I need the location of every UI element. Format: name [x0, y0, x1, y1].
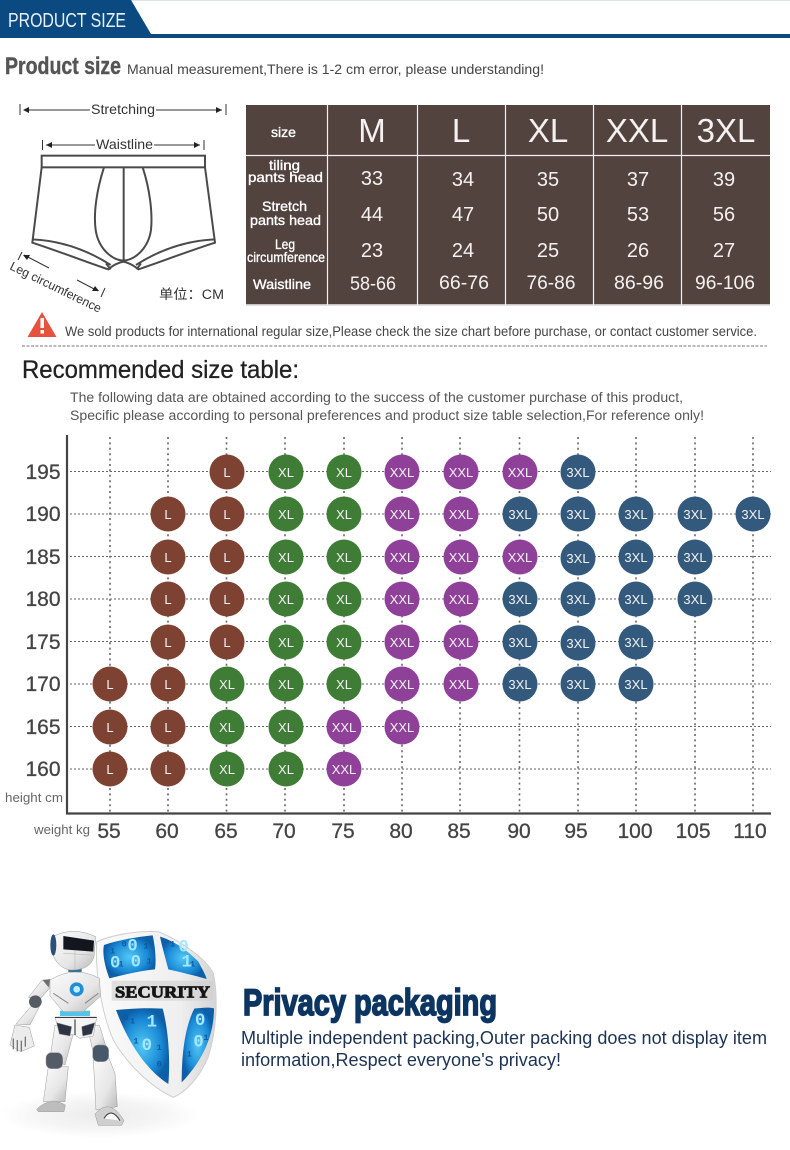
shield binary digits: 1 [190, 960, 195, 970]
pelvis [55, 1017, 97, 1038]
row: tiling pants head: 35 [537, 169, 559, 191]
height axis labels: 160 [25, 758, 61, 781]
row: stretch pants head [250, 198, 735, 228]
row: stretch pants head: 50 [537, 204, 559, 226]
row 185: 3XL [683, 550, 707, 565]
weight axis labels: 65 [214, 820, 238, 843]
row 170: L [106, 677, 114, 692]
stretching dimension: Stretching [91, 101, 155, 117]
row 165: XL [219, 720, 235, 735]
row: stretch pants head: 56 [713, 204, 735, 226]
row: leg circumference: circumference [247, 249, 325, 265]
table header row: M [358, 112, 386, 149]
row 170: L [164, 677, 172, 692]
row: leg circumference: 27 [713, 240, 735, 262]
weight axis labels: 90 [507, 820, 531, 843]
row 195: XXL [449, 465, 473, 480]
row: waistline: 96-106 [695, 273, 755, 294]
row 185: 3XL [566, 551, 590, 566]
shield binary digits: 1 [187, 1050, 192, 1060]
intro text [70, 390, 704, 423]
weight axis labels: 70 [272, 820, 296, 843]
table header row [271, 112, 755, 149]
row 185: XXL [449, 550, 473, 565]
weight axis labels: 55 [97, 820, 121, 843]
row 190: L [164, 507, 172, 522]
weight axis labels: 80 [389, 820, 413, 843]
weight axis labels: 105 [675, 820, 711, 843]
shield binary digits [110, 938, 209, 1070]
shield binary digits: 0 [157, 1060, 162, 1070]
row 180: 3XL [566, 592, 590, 607]
row: stretch pants head: Stretch [262, 198, 307, 214]
row 190: 3XL [508, 507, 532, 522]
row 175: 3XL [508, 635, 532, 650]
icon: warning triangle [28, 312, 56, 337]
shield binary digits: 1 [143, 941, 149, 951]
row: waistline: 86-96 [614, 273, 664, 294]
row: leg circumference: 23 [361, 240, 383, 262]
table header row: XXL [606, 112, 668, 149]
shield binary digits: 1 [182, 954, 192, 973]
row: stretch pants head: 53 [627, 204, 649, 226]
row 190: 3XL [566, 507, 590, 522]
robot [10, 931, 124, 1125]
row 175: XL [336, 635, 352, 650]
legs [43, 1067, 68, 1102]
privacy packaging text: Multiple independent packing,Outer packing does not display item [241, 1028, 767, 1048]
row 195: XXL [390, 465, 414, 480]
row 195: 3XL [566, 465, 590, 480]
row 185: XL [278, 550, 294, 565]
axes [67, 435, 771, 814]
shield binary digits: 1 [147, 1014, 157, 1033]
torso [50, 972, 101, 1012]
row 175 [150, 624, 654, 660]
row 185: XXL [390, 550, 414, 565]
table header row: XL [528, 112, 568, 149]
table header row: 3XL [697, 112, 755, 149]
row 190: XL [336, 507, 352, 522]
row 170: XXL [449, 677, 473, 692]
row 170: XXL [390, 677, 414, 692]
row 160: XL [278, 762, 294, 777]
shield binary digits: 0 [193, 1034, 204, 1053]
row: leg circumference: Leg [275, 236, 295, 252]
row: tiling pants head: 39 [713, 169, 735, 191]
row 185: L [223, 550, 231, 565]
shield binary digits: 0 [131, 954, 141, 973]
row: waistline: 58-66 [350, 274, 396, 295]
weight axis labels: 95 [564, 820, 588, 843]
shield binary digits: 0 [122, 940, 127, 950]
heading: product size: Product size [5, 53, 121, 80]
height axis labels: 185 [25, 546, 61, 569]
warning notice [28, 312, 757, 339]
row 195: L [223, 465, 231, 480]
row 185 [150, 540, 712, 576]
row 165 [92, 710, 420, 744]
row 180: L [223, 592, 231, 607]
shield binary digits: 0 [127, 938, 138, 957]
shield binary digits: 1 [203, 1033, 209, 1043]
row 170: 3XL [508, 677, 532, 692]
grid [70, 437, 771, 813]
row 175: XXL [390, 635, 414, 650]
row: waistline: Waistline [253, 276, 311, 292]
row 180: L [164, 592, 172, 607]
row 160: L [164, 762, 172, 777]
shield binary digits: 0 [123, 1013, 129, 1023]
row 190: XL [278, 507, 294, 522]
row 180: 3XL [508, 592, 532, 607]
row 185: XL [336, 550, 352, 565]
neck [68, 967, 82, 972]
weight axis labels: 100 [617, 820, 653, 843]
height axis labels: 175 [25, 631, 61, 654]
row 185: XXL [508, 550, 532, 565]
intro text: The following data are obtained according to the success of the customer purchase of this product, [70, 390, 683, 405]
row: tiling pants head: 33 [361, 168, 383, 190]
shield [96, 931, 216, 1097]
weight axis labels [33, 820, 767, 843]
row 185: 3XL [624, 550, 648, 565]
shield binary digits: 0 [178, 939, 189, 958]
arm [28, 979, 50, 1000]
shield binary digits: 1 [130, 1016, 135, 1026]
recommended size chart [5, 435, 771, 843]
row: tiling pants head [248, 157, 735, 191]
weight axis labels: 75 [331, 820, 355, 843]
row 170: 3XL [566, 677, 590, 692]
row: leg circumference: 24 [452, 240, 474, 262]
privacy packaging text: information,Respect everyone's privacy! [241, 1050, 561, 1070]
row 180: XL [336, 592, 352, 607]
row 170: 3XL [624, 677, 648, 692]
row: leg circumference: 25 [537, 240, 559, 262]
row 160: XXL [332, 762, 356, 777]
row 170 [92, 666, 654, 702]
weight axis labels: 85 [447, 820, 471, 843]
row 160 [92, 752, 362, 786]
row: stretch pants head: 44 [361, 204, 383, 226]
row 190: 3XL [741, 507, 765, 522]
row 165: L [106, 720, 114, 735]
weight axis labels: 110 [733, 820, 767, 843]
weight axis labels: 60 [155, 820, 179, 843]
stretching dimension [20, 101, 226, 117]
diagram: boxer briefs measurements [8, 101, 226, 316]
row 180: XXL [449, 592, 473, 607]
shield binary digits: 1 [118, 960, 124, 970]
row 195: XXL [508, 465, 532, 480]
table header row: L [452, 112, 470, 149]
row 180: 3XL [624, 592, 648, 607]
row: waistline [253, 273, 755, 295]
leg circumference dimension: Leg circumference [8, 259, 104, 316]
header banner [0, 0, 790, 38]
row: stretch pants head: 47 [452, 204, 474, 226]
waistline dimension: Waistline [96, 136, 153, 152]
row 175: XXL [449, 635, 473, 650]
row 180: XXL [390, 592, 414, 607]
row 190: 3XL [683, 507, 707, 522]
row 170: XL [278, 677, 294, 692]
height axis labels: 195 [25, 461, 61, 484]
illustration: robot with security shield [0, 931, 216, 1138]
boxer outline [32, 156, 215, 269]
row 190: XXL [390, 507, 414, 522]
privacy packaging text [241, 982, 767, 1070]
row 180 [150, 582, 712, 616]
heading: product size [5, 53, 544, 80]
row 175: 3XL [566, 636, 590, 651]
header banner: PRODUCT SIZE [8, 10, 126, 32]
shield binary digits: 1 [110, 946, 115, 956]
row 170: XL [219, 677, 235, 692]
row 180: 3XL [683, 592, 707, 607]
height axis labels: 170 [25, 673, 61, 696]
shield binary digits: 0 [195, 1012, 205, 1031]
row 180: XL [278, 592, 294, 607]
waistline dimension [42, 136, 204, 152]
warning notice: We sold products for international regular size,Please check the size chart before purchase, or contact customer service. [65, 323, 757, 339]
row 190 [150, 496, 770, 532]
head [53, 931, 96, 970]
row 165: L [164, 720, 172, 735]
weight axis labels: weight kg [33, 822, 90, 837]
row 170: XL [336, 677, 352, 692]
height axis labels: 165 [25, 716, 61, 739]
row: tiling pants head: 37 [627, 169, 649, 191]
row: leg circumference: 26 [627, 240, 649, 262]
heading: recommended size table: Recommended size table: [22, 356, 299, 384]
row 195 [210, 454, 596, 490]
heading: product size: Manual measurement,There is 1-2 cm error, please understanding! [127, 61, 544, 77]
shield binary digits: 1 [147, 956, 152, 966]
unit label: 单位：CM [159, 287, 224, 302]
row 175: L [223, 635, 231, 650]
shield binary digits: 1 [157, 1043, 162, 1053]
row 165: XXL [332, 720, 356, 735]
row 175: 3XL [624, 635, 648, 650]
size table [246, 105, 770, 306]
height axis labels: height cm [5, 790, 63, 805]
shield label: SECURITY [115, 982, 210, 1001]
row 160: L [106, 762, 114, 777]
row 175: L [164, 635, 172, 650]
row 160: XL [219, 762, 235, 777]
table header row: size [271, 124, 296, 140]
row 175: XL [278, 635, 294, 650]
row 165: XL [278, 720, 294, 735]
row 185: L [164, 550, 172, 565]
row 190: XXL [449, 507, 473, 522]
row: waistline: 66-76 [439, 273, 489, 294]
shield binary digits: 1 [170, 940, 175, 950]
row: tiling pants head: pants head [248, 169, 323, 185]
height axis labels: 190 [25, 503, 61, 526]
row 195: XL [278, 465, 294, 480]
row 165: XXL [390, 720, 414, 735]
height axis labels: 180 [25, 588, 61, 611]
row: tiling pants head: 34 [452, 169, 474, 191]
shield binary digits: 1 [133, 1036, 139, 1046]
height axis labels [5, 461, 63, 805]
row: stretch pants head: pants head [250, 212, 321, 228]
row 190: 3XL [624, 507, 648, 522]
row 195: XL [336, 465, 352, 480]
shield binary digits: 0 [110, 954, 120, 973]
privacy packaging text: Privacy packaging [243, 982, 497, 1023]
intro text: Specific please according to personal preferences and product size table selection,For reference only! [70, 408, 704, 423]
row: waistline: 76-86 [526, 273, 576, 294]
row: leg circumference [247, 236, 735, 265]
row 190: L [223, 507, 231, 522]
shield binary digits: 0 [142, 1037, 152, 1056]
row: tiling pants head: tiling [269, 157, 300, 173]
